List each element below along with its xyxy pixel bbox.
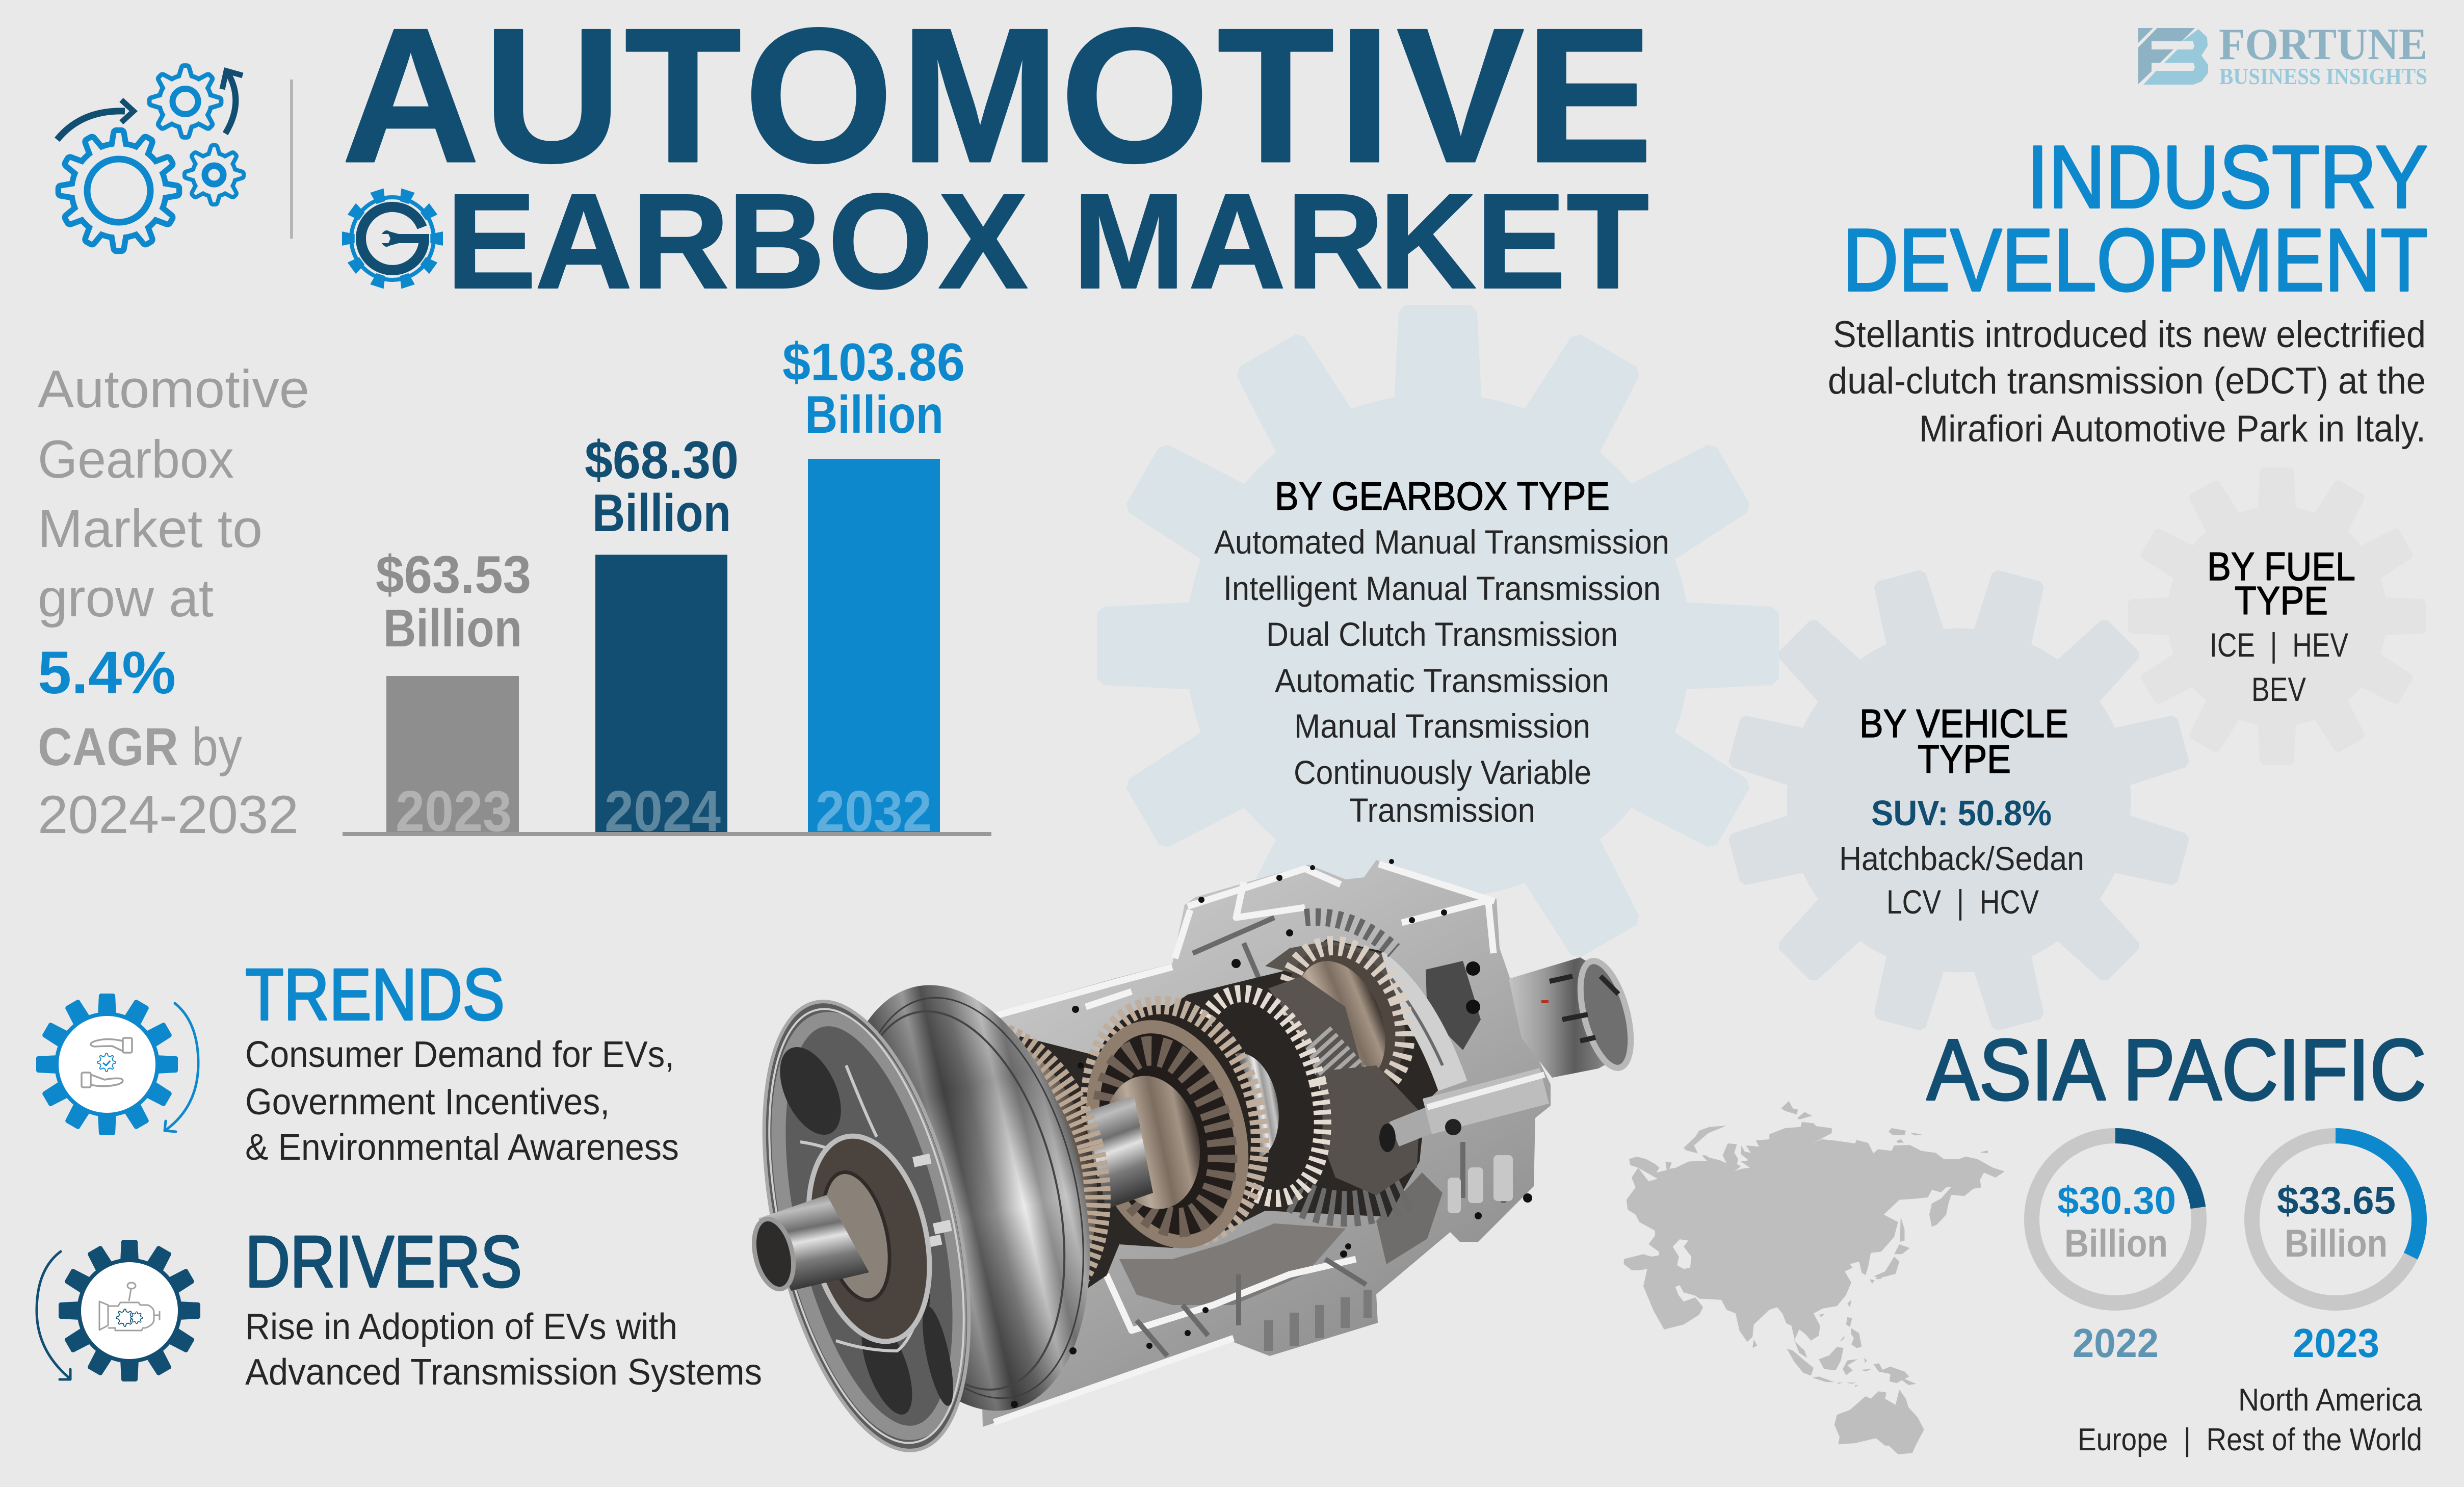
bar 2024: Billion	[592, 484, 731, 543]
bar 2023	[376, 545, 531, 843]
image: gearbox cutaway illustration	[726, 859, 1641, 1470]
gear: by fuel type background	[2128, 467, 2426, 765]
gear ring 1	[860, 1008, 1128, 1337]
heading: industry development	[1843, 127, 2428, 309]
text: by vehicle type	[1839, 701, 2084, 921]
text: CAGR statement: grow at	[38, 568, 214, 628]
rib casting	[1374, 963, 1453, 1086]
central shaft	[1086, 1096, 1153, 1209]
text: by fuel type: BY FUEL	[2207, 544, 2355, 589]
text: trends detail: Consumer Demand for EVs,	[245, 1034, 674, 1075]
text: CAGR statement	[38, 359, 309, 845]
text: industry development detail: Stellantis introduced its new electrified	[1833, 314, 2426, 355]
bar 2032: Billion	[805, 385, 943, 445]
text: industry development detail	[1828, 314, 2426, 450]
text: by gearbox type: Continuously Variable	[1294, 753, 1591, 791]
text: by fuel type: TYPE	[2235, 578, 2328, 623]
front plate	[726, 982, 1007, 1470]
bar 2032: $103.86	[782, 333, 965, 392]
donut chart 2023: 2023	[2293, 1320, 2379, 1366]
text: by gearbox type: Manual Transmission	[1294, 707, 1590, 745]
text: by fuel type: BEV	[2251, 670, 2306, 708]
housing cavity	[1014, 939, 1444, 1300]
icon: trends gear	[36, 994, 198, 1135]
input shaft	[748, 1195, 869, 1293]
logo: Fortune Business Insights: FORTUNE	[2219, 20, 2427, 69]
text: by vehicle type: Hatchback/Sedan	[1839, 840, 2084, 877]
text: by vehicle type: TYPE	[1918, 737, 2011, 781]
axis line	[343, 832, 991, 836]
text: drivers detail: Rise in Adoption of EVs with	[245, 1307, 677, 1347]
gear: by gearbox type background	[1097, 305, 1779, 987]
text: by gearbox type: Automatic Transmission	[1275, 662, 1609, 699]
text: other regions	[2078, 1382, 2422, 1457]
donut chart 2022: $30.30	[2057, 1179, 2176, 1222]
map: Asia Pacific	[1624, 1101, 2005, 1454]
lower casting shading	[1119, 1223, 1346, 1305]
text: trends detail	[245, 1034, 679, 1168]
housing	[973, 860, 1551, 1427]
text: trends detail: & Environmental Awareness	[245, 1127, 679, 1168]
bar 2023: 2023	[396, 779, 512, 843]
icon: drivers gear	[37, 1240, 200, 1381]
text: industry development detail: dual-clutch transmission (eDCT) at the	[1828, 360, 2426, 402]
icon: G gear letter	[342, 189, 443, 289]
bar 2024: 2024	[605, 779, 721, 843]
text: other regions: North America	[2238, 1382, 2422, 1418]
donut chart 2022: Billion	[2064, 1222, 2168, 1265]
casting highlights	[975, 864, 1534, 1422]
title line 2: EARBOX MARKET	[446, 166, 1649, 317]
text: CAGR statement: Automotive	[38, 359, 309, 419]
gear ring 4	[1265, 928, 1426, 1111]
text: drivers detail: Advanced Transmission Systems	[245, 1352, 762, 1393]
donut chart 2023: Billion	[2285, 1222, 2388, 1265]
divider	[290, 80, 293, 239]
donut chart 2022	[2032, 1136, 2199, 1366]
bar 2024: $68.30	[585, 431, 739, 490]
text: by gearbox type: BY GEARBOX TYPE	[1275, 474, 1610, 518]
gear ring 2	[1066, 987, 1283, 1256]
text: other regions: Europe | Rest of the World	[2078, 1422, 2422, 1457]
text: CAGR statement: 2024-2032	[38, 785, 299, 845]
lower comb gear	[1295, 1193, 1407, 1209]
text: by gearbox type: Dual Clutch Transmission	[1266, 615, 1618, 653]
panel: trends	[36, 954, 679, 1168]
flywheel disc	[798, 960, 1129, 1436]
heading: drivers: DRIVERS	[245, 1221, 522, 1302]
bar 2023: Billion	[383, 599, 522, 658]
text: CAGR statement: 5.4%	[38, 639, 176, 707]
donut chart 2023	[2252, 1136, 2419, 1366]
donut chart 2023: $33.65	[2277, 1179, 2396, 1222]
title	[342, 0, 1653, 317]
top cast rock	[1265, 941, 1392, 999]
text: by fuel type	[2207, 544, 2355, 708]
text: by vehicle type: BY VEHICLE	[1859, 701, 2068, 746]
text: by gearbox type: Automated Manual Transmission	[1214, 523, 1669, 561]
logo: Fortune Business Insights: BUSINESS INSIGHTS	[2219, 63, 2427, 89]
small dark gear	[1315, 1040, 1361, 1091]
rear window	[1426, 961, 1481, 1050]
text: CAGR statement: Market to	[38, 499, 263, 559]
sump ribs	[1264, 1290, 1372, 1351]
text: CAGR statement: Gearbox	[38, 430, 234, 489]
text: CAGR statement: CAGR by	[38, 717, 242, 777]
rear hub	[1509, 956, 1641, 1078]
text: by vehicle type: SUV: 50.8%	[1871, 793, 2052, 833]
text: by gearbox type: Intelligent Manual Transmission	[1223, 569, 1661, 607]
hub cone	[1092, 1067, 1212, 1218]
text: by fuel type: ICE | HEV	[2210, 626, 2348, 664]
output pipe	[1379, 1075, 1544, 1152]
center hub	[790, 1124, 948, 1353]
text: industry development detail: Mirafiori Automotive Park in Italy.	[1919, 408, 2426, 450]
gear: by vehicle type background	[1674, 516, 2243, 1085]
text: trends detail: Government Incentives,	[245, 1082, 610, 1123]
donut chart 2022: 2022	[2073, 1320, 2159, 1366]
rocky ring	[1268, 976, 1364, 1109]
heading: trends: TRENDS	[245, 954, 505, 1035]
logo: Fortune Business Insights	[2138, 20, 2427, 89]
panel: drivers	[37, 1221, 762, 1393]
text: by gearbox type: Transmission	[1349, 791, 1535, 829]
text: by gearbox type	[1214, 474, 1669, 829]
lower tubes	[1448, 1155, 1513, 1213]
bar 2024	[585, 431, 739, 843]
text: drivers detail	[245, 1307, 762, 1393]
bar 2032: 2032	[816, 779, 932, 843]
gear ring 3	[1175, 980, 1343, 1212]
bar chart	[343, 333, 991, 843]
text: by vehicle type: LCV | HCV	[1886, 883, 2039, 921]
icon: rotating gears	[57, 68, 243, 248]
cast lump	[1320, 1065, 1420, 1195]
bar 2032	[782, 333, 965, 843]
bar 2023: $63.53	[376, 545, 531, 605]
housing bolts	[1011, 859, 1532, 1408]
heading: Asia Pacific: ASIA PACIFIC	[1927, 1022, 2426, 1118]
